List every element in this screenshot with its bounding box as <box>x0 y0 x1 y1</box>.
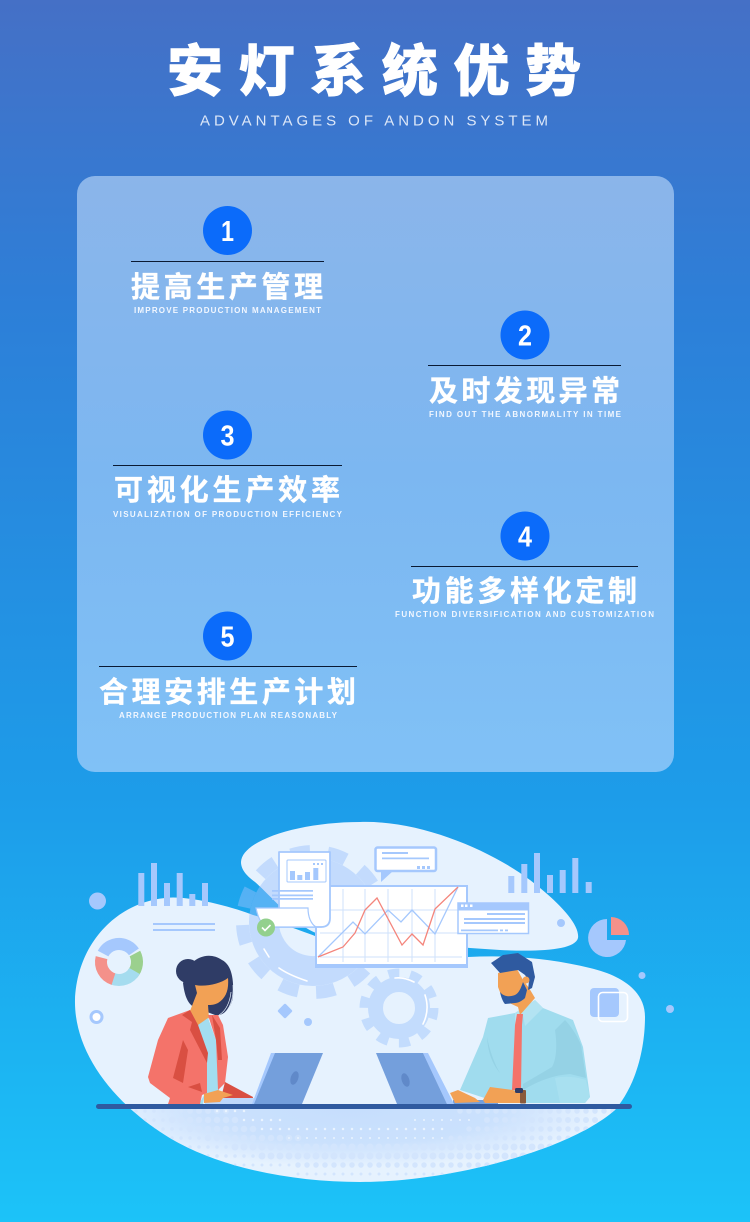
shirt <box>198 1018 219 1104</box>
tie <box>512 1014 523 1090</box>
item 2: find out the abnormality in time: 及时发现异常 <box>429 375 620 408</box>
item 3: visualization of production efficiency: 3 <box>220 420 234 452</box>
item 5: arrange production plan reasonably <box>99 612 357 720</box>
hand <box>204 1090 233 1103</box>
item 4: function diversification and customization <box>395 512 654 619</box>
hair <box>176 959 200 983</box>
item 2: find out the abnormality in time: 2 <box>518 320 532 352</box>
face and neck <box>190 978 228 1026</box>
icon: overlapping squares <box>590 988 628 1022</box>
item 1: improve production management: 提高生产管理 <box>131 271 323 304</box>
shirt folds <box>487 1020 586 1090</box>
keyboard strip <box>205 1098 255 1104</box>
bar chart: right <box>508 853 592 893</box>
bar chart: left <box>138 863 208 906</box>
line chart panel <box>316 886 467 968</box>
text lines: left <box>153 923 215 931</box>
laptop: man <box>376 1053 454 1104</box>
table top <box>96 1104 632 1109</box>
panel: advantages card <box>77 176 674 772</box>
item 1: improve production management: 1 <box>221 216 234 248</box>
icon: small gear <box>364 973 434 1043</box>
blob: upper background shape <box>241 822 578 951</box>
watch <box>520 1090 526 1104</box>
item 4: function diversification and customization: 4 <box>518 522 532 554</box>
shirt <box>460 1000 590 1103</box>
title: 安灯系统优势 <box>167 40 581 103</box>
item 4: function diversification and customization: FUNCTION DIVERSIFICATION AND CUSTOMIZATION <box>395 610 654 619</box>
item 3: visualization of production efficiency: 可视化生产效率 <box>114 474 340 507</box>
jacket right <box>208 1015 228 1090</box>
laptop: woman <box>252 1053 323 1104</box>
icon: pie chart <box>588 917 629 957</box>
item 1: improve production management <box>131 206 324 315</box>
document with mini bar chart <box>256 852 330 927</box>
browser window <box>458 903 528 934</box>
ear <box>522 976 530 984</box>
large gear highlights <box>264 949 307 981</box>
beard <box>500 982 527 1004</box>
item 4: function diversification and customization: 功能多样化定制 <box>412 575 637 608</box>
item 2: find out the abnormality in time <box>428 310 622 419</box>
halftone table shadow <box>132 1109 616 1176</box>
icon: large gear <box>229 838 397 1006</box>
keyboard <box>453 1100 498 1104</box>
item 1: improve production management: IMPROVE PRODUCTION MANAGEMENT <box>134 306 321 315</box>
character: man <box>450 953 590 1104</box>
item 2: find out the abnormality in time: FIND OUT THE ABNORMALITY IN TIME <box>429 410 622 419</box>
item 3: visualization of production efficiency: VISUALIZATION OF PRODUCTION EFFICIENCY <box>113 510 343 519</box>
jacket left <box>148 1010 207 1104</box>
item 5: arrange production plan reasonably: 合理安排生产计划 <box>99 676 356 709</box>
item 3: visualization of production efficiency <box>113 410 343 519</box>
icon: green check badge <box>257 918 275 936</box>
hands <box>450 1087 520 1103</box>
collar <box>515 1000 543 1028</box>
speech bubble <box>376 848 436 882</box>
subtitle: ADVANTAGES OF ANDON SYSTEM <box>200 112 548 130</box>
blob: main background shape <box>75 898 645 1182</box>
hair <box>491 953 535 990</box>
decorative dots <box>89 892 674 1026</box>
illustration: office team <box>75 822 674 1182</box>
item 5: arrange production plan reasonably: 5 <box>220 622 234 654</box>
neck and face <box>498 969 535 1015</box>
item 5: arrange production plan reasonably: ARRANGE PRODUCTION PLAN REASONABLY <box>119 711 338 720</box>
character: woman <box>148 956 255 1104</box>
icon: donut chart <box>94 937 144 987</box>
